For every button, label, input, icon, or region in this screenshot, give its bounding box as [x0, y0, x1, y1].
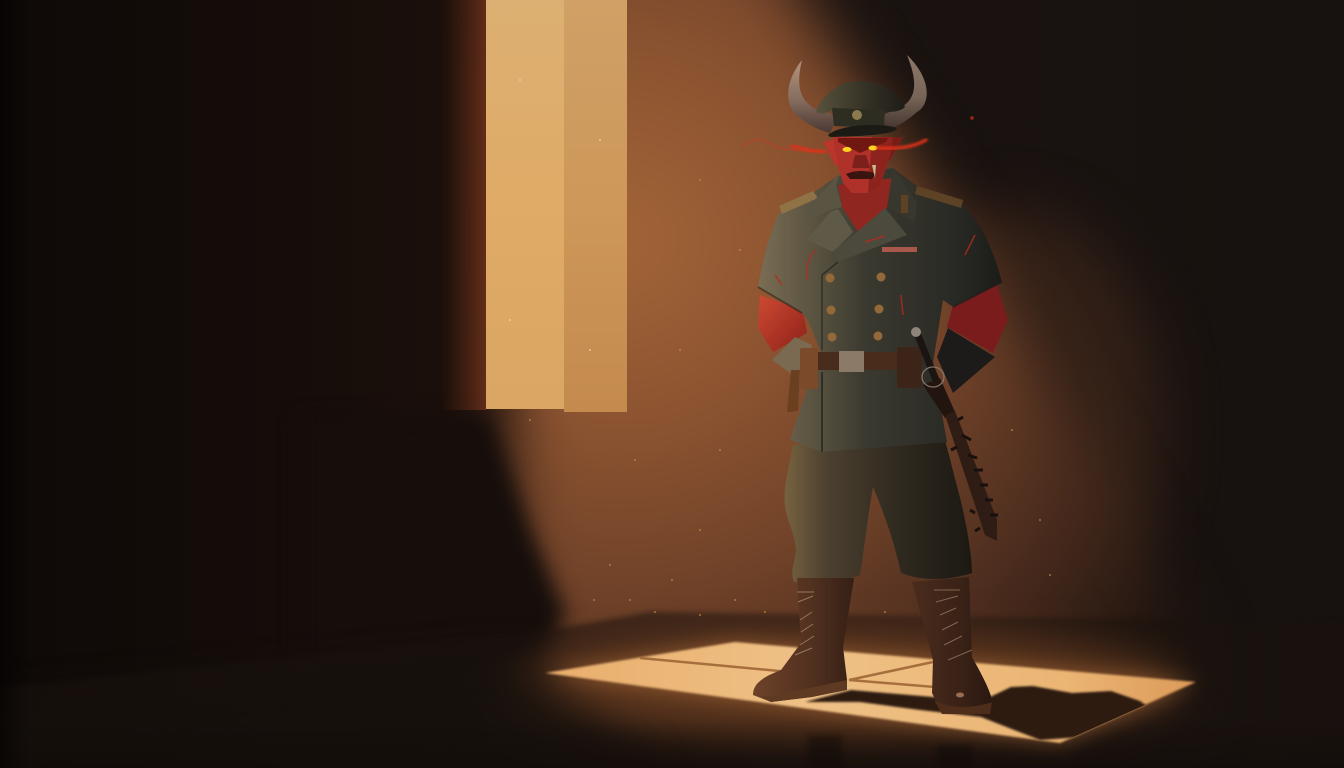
right boot toe shine	[956, 692, 964, 698]
light patch on floor	[545, 642, 1196, 743]
guard ring	[922, 367, 944, 387]
light beam glowing on the wall	[510, 0, 1190, 720]
patch glow	[545, 642, 1196, 743]
face shadow side	[868, 137, 893, 193]
hat visor	[828, 125, 897, 137]
window left panel	[486, 0, 564, 409]
hat	[816, 81, 905, 137]
right glove cuff	[937, 328, 995, 393]
wall shadow beneath window	[300, 416, 566, 700]
dust particles	[509, 79, 1051, 616]
red glow at window edge	[440, 0, 486, 410]
left ear	[823, 138, 846, 168]
right boot sole	[934, 700, 992, 714]
left boot shaft and toe	[753, 578, 854, 702]
belt	[787, 347, 922, 412]
right ear	[880, 137, 903, 168]
neck and chest skin	[838, 178, 893, 232]
sword handle	[917, 333, 936, 380]
left edge vignette	[0, 0, 30, 768]
left stand collar	[805, 173, 842, 222]
nose	[852, 155, 870, 168]
right boot	[912, 577, 992, 714]
left eye	[842, 147, 852, 152]
patch shape	[545, 642, 1196, 743]
right boot laces	[934, 590, 972, 660]
belt buckle	[839, 351, 864, 372]
medal ribbons	[882, 247, 917, 252]
left holster	[787, 370, 800, 412]
soft outer glow right of the figure	[860, 210, 1160, 650]
hat badge	[852, 110, 862, 120]
head	[743, 55, 973, 193]
left boot sole	[753, 680, 847, 702]
left boot	[753, 578, 854, 702]
figure shadow on patch	[805, 686, 1180, 740]
face	[833, 137, 893, 193]
hat crown	[816, 81, 905, 113]
left boot laces	[795, 592, 814, 655]
demon officer figure	[743, 55, 1008, 714]
jacket body and sleeves	[758, 168, 1002, 452]
belt strap	[812, 352, 902, 370]
floor	[0, 612, 1344, 768]
right stand collar	[887, 168, 917, 222]
spiked sword	[911, 327, 998, 541]
brow	[838, 138, 888, 153]
pommel	[911, 327, 921, 337]
right lapel	[832, 208, 907, 262]
jacket front edge	[822, 262, 838, 350]
window right panel	[564, 0, 627, 412]
left horn	[788, 60, 838, 133]
left trouser leg	[785, 440, 880, 583]
blood streaks	[775, 235, 975, 315]
right eye	[868, 146, 878, 150]
left shoulder board	[779, 191, 818, 214]
floor shadow at left	[0, 655, 660, 768]
skirt front edge	[821, 372, 823, 452]
fang	[872, 165, 876, 178]
right pouch	[897, 347, 922, 388]
right shoulder board	[915, 186, 963, 208]
spiked blade	[945, 411, 997, 541]
sleeve hem shadow	[758, 282, 1002, 313]
floor glow around light patch	[520, 630, 1180, 740]
right arm	[947, 285, 1008, 353]
right boot shaft and toe	[912, 577, 992, 713]
right horn	[881, 55, 927, 130]
window bar shadows	[640, 658, 935, 687]
collar insignia	[901, 195, 908, 213]
jacket buttons	[826, 272, 886, 342]
left pouch	[800, 348, 818, 389]
trousers	[785, 440, 972, 583]
left glove cuff	[772, 337, 812, 380]
bright window	[486, 0, 627, 412]
red energy wisps	[743, 117, 973, 152]
left lapel	[807, 209, 853, 252]
spikes	[951, 417, 998, 531]
scabbard	[923, 378, 955, 418]
hat band	[832, 108, 885, 128]
left arm	[758, 295, 807, 352]
mouth	[846, 171, 876, 179]
boot reflections on floor	[808, 735, 972, 768]
bottom floor darkening	[0, 720, 1344, 768]
jacket	[758, 168, 1002, 452]
right trouser leg	[870, 440, 972, 579]
